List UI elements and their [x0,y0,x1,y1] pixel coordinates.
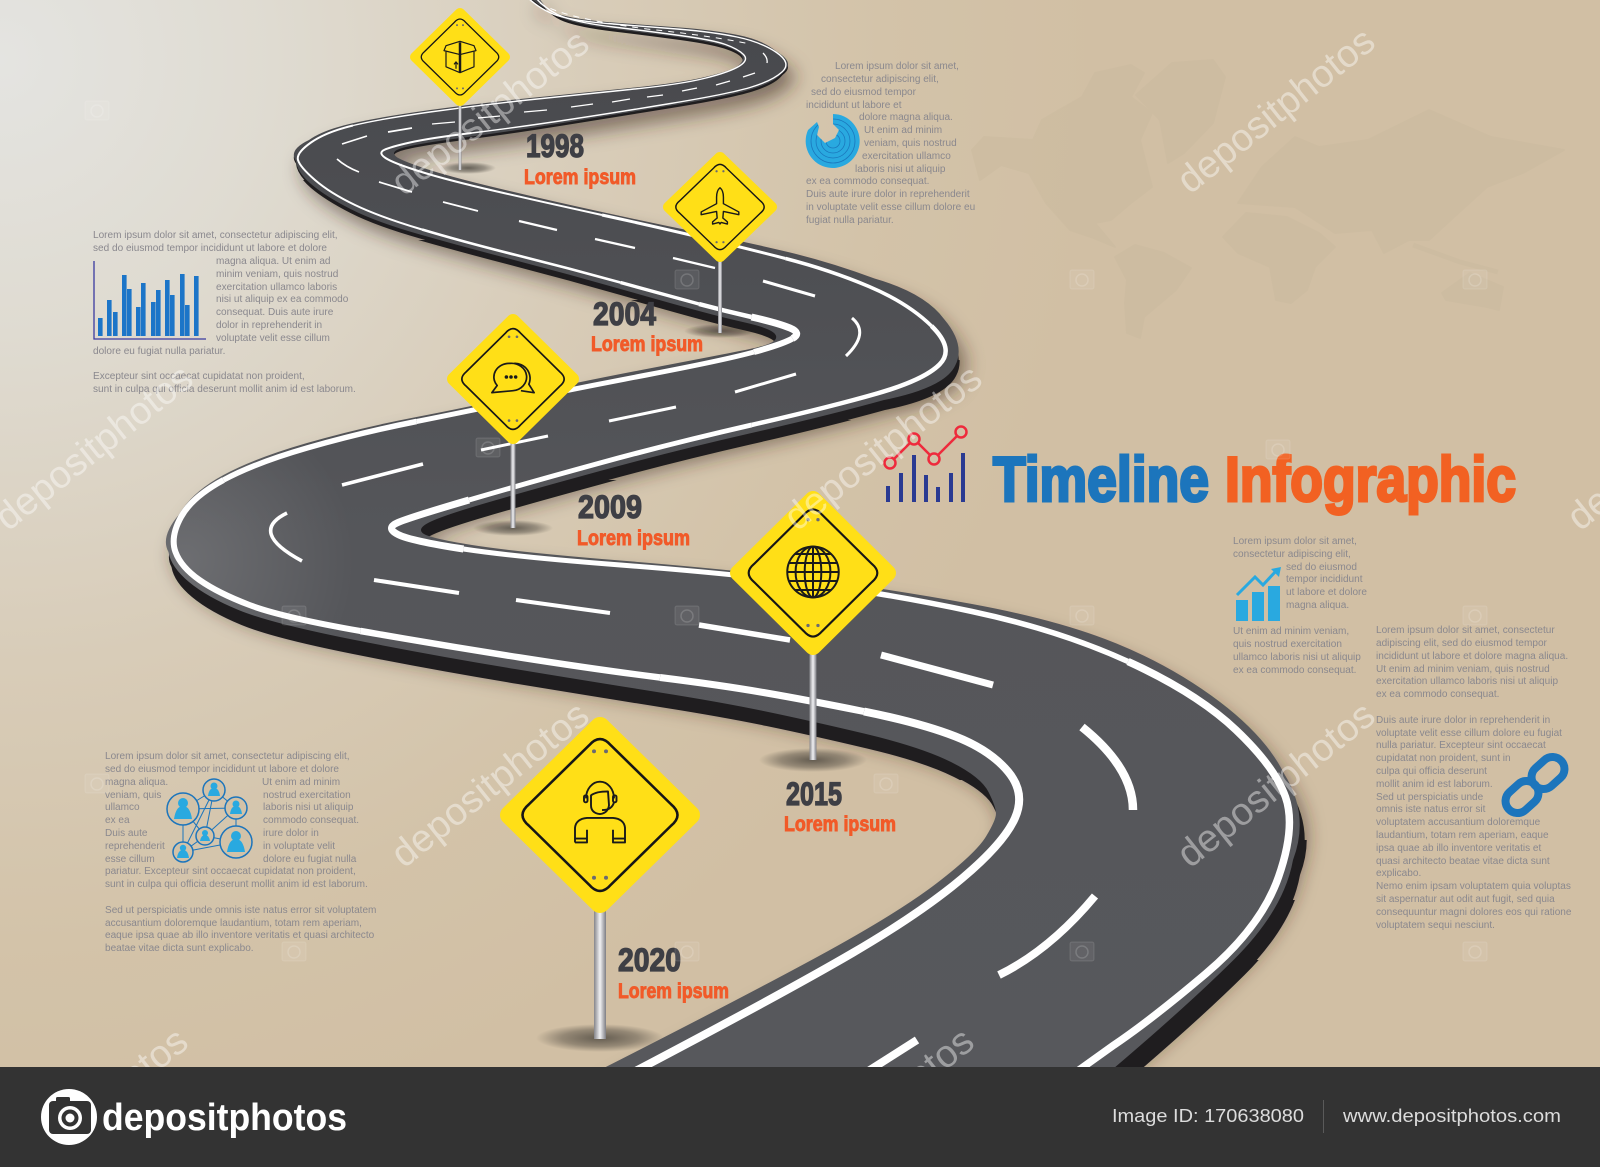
text block: upper left: Excepteur sint occaecat cupidatat non proident, [93,371,305,382]
text block: lower left: nostrud exercitation [263,790,351,801]
text block: far right: voluptatem sequi nesciunt. [1376,920,1495,931]
text block: upper left: nisi ut aliquip ex ea commodo [216,294,349,305]
text block: far right: incididunt ut labore et dolore magna aliqua. [1376,651,1568,662]
year label 2020: Lorem ipsum [618,979,729,1003]
year label 1998: 1998 [526,128,584,164]
text block: lower left: laboris nisi ut aliquip [263,802,354,813]
text block: right small: ex ea commodo consequat. [1233,665,1356,676]
text block: lower left: veniam, quis [105,790,161,801]
text block: right small: Ut enim ad minim veniam, [1233,626,1349,637]
footer banner [0,1067,1600,1167]
road black side lip [166,0,1311,1095]
text block: lower left: in voluptate velit [263,841,335,852]
year label 2015: 2015 [786,776,842,812]
sign 2004: plane [669,158,771,333]
text block: upper left: minim veniam, quis nostrud [216,269,338,280]
watermark text: depositphotos [1169,19,1383,202]
icon: radial chart [806,114,860,168]
text block: top centre: veniam, quis nostrud [864,138,957,149]
world map [972,60,1564,338]
text block: right small: Lorem ipsum dolor sit amet, [1233,536,1357,547]
icon: chain link [1501,752,1569,818]
text block: right small: ullamco laboris nisi ut aliquip [1233,652,1361,663]
icon: bar chart [94,261,206,339]
text block: right small: consectetur adipiscing elit, [1233,549,1351,560]
text block: top centre: incididunt ut labore et [806,100,902,111]
text block: far right: Duis aute irure dolor in reprehenderit in [1376,715,1550,726]
text block: upper left: exercitation ullamco laboris [216,282,337,293]
year label 2009: 2009 [578,489,642,525]
sign 2009: chat bubbles [454,320,572,528]
text block: upper left: Lorem ipsum dolor sit amet, consectetur adipiscing elit, [93,230,338,241]
logo camera icon [41,1089,97,1145]
road light patch [166,466,294,622]
text block: lower left: ullamco [105,802,140,813]
text block: upper left: consequat. Duis aute irure [216,307,334,318]
year label 2004: Lorem ipsum [591,332,703,356]
text block: upper left: magna aliqua. Ut enim ad [216,256,330,267]
text block: lower left: irure dolor in [263,828,319,839]
text block: upper left: dolore eu fugiat nulla pariatur. [93,346,225,357]
text block: top centre: fugiat nulla pariatur. [806,215,894,226]
logo wordmark: depositphotos [102,1097,347,1139]
sign 2020: support agent [510,727,690,1039]
image id: Image ID: 170638080 [1112,1106,1304,1126]
text block: top centre: laboris nisi ut aliquip [855,164,946,175]
watermark text: depositphotos [1169,693,1383,876]
text block: far right: quasi architecto beatae vitae dicta sunt [1376,856,1550,867]
sign 1998: box [415,13,505,170]
watermark camera marks [85,101,1487,961]
watermark text: depositphotos [383,21,597,204]
text block: right small [1233,536,1367,676]
text block: far right: Lorem ipsum dolor sit amet, consectetur [1376,625,1555,636]
text block: top centre [806,61,975,226]
watermark text: depositphotos [383,693,597,876]
text block: lower left: esse cillum [105,854,155,865]
text block: top centre: ex ea commodo consequat. [806,176,929,187]
year label 2015 [784,776,896,836]
year label 2004: 2004 [593,296,656,332]
text block: lower left: accusantium doloremque laudantium, totam rem aperiam, [105,918,362,929]
text block: far right: ex ea commodo consequat. [1376,689,1499,700]
text block: far right: adipiscing elit, sed do eiusmod tempor [1376,638,1548,649]
road centre dashes [271,3,1133,1075]
text block: lower left: sed do eiusmod tempor incididunt ut labore et dolore [105,764,339,775]
text block: upper left: voluptate velit esse cillum [216,333,330,344]
text block: top centre: dolore magna aliqua. [859,112,953,123]
text block: right small: quis nostrud exercitation [1233,639,1342,650]
year label 2004 [591,296,703,356]
text block: lower left: reprehenderit [105,841,165,852]
year label 2009: Lorem ipsum [577,526,690,550]
text block: lower left: pariatur. Excepteur sint occaecat cupidatat non proident, [105,866,356,877]
text block: far right: laudantium, totam rem aperiam, eaque [1376,830,1549,841]
text block: far right: omnis iste natus error sit [1376,804,1486,815]
text block: lower left: beatae vitae dicta sunt explicabo. [105,943,254,954]
text block: far right: consequuntur magni dolores eos qui ratione [1376,907,1572,918]
watermark text: depositphotos [776,356,990,539]
road white edge line: inner side [174,0,1019,1075]
text block: right small: magna aliqua. [1286,600,1349,611]
text block: lower left: Lorem ipsum dolor sit amet, consectetur adipiscing elit, [105,751,350,762]
text block: far right: sit aspernatur aut odit aut fugit, sed quia [1376,894,1555,905]
text block: lower left: eaque ipsa quae ab illo inventore veritatis et quasi architecto [105,930,375,941]
title [993,445,1516,515]
year label 2009 [577,489,690,550]
text block: far right: culpa qui officia deserunt [1376,766,1487,777]
title: Timeline [993,445,1209,515]
text block: top centre: Duis aute irure dolor in reprehenderit [806,189,970,200]
text block: right small: sed do eiusmod [1286,562,1357,573]
text block: top centre: exercitation ullamco [862,151,951,162]
website: www.depositphotos.com [1342,1106,1561,1126]
title icon: line and bars [884,426,966,502]
text block: far right: nulla pariatur. Excepteur sint occaecat [1376,740,1546,751]
text block: top centre: consectetur adipiscing elit, [821,74,939,85]
text block: lower left: ex ea [105,815,130,826]
text block: lower left: Duis aute [105,828,148,839]
text block: top centre: in voluptate velit esse cillum dolore eu [806,202,975,213]
icon: people network [167,779,252,862]
road white edge line: outer side [381,0,1289,1075]
year label 2020 [618,942,729,1003]
text block: right small: ut labore et dolore [1286,587,1367,598]
text block: upper left: sed do eiusmod tempor incididunt ut labore et dolore [93,243,327,254]
road soft shadow [173,8,1307,1093]
text block: lower left: sunt in culpa qui officia deserunt mollit anim id est laborum. [105,879,368,890]
text block: right small: tempor incididunt [1286,574,1363,585]
text block: lower left [105,751,376,954]
text block: lower left: dolore eu fugiat nulla [263,854,357,865]
sign 2015: globe [738,499,888,760]
text block: far right: Nemo enim ipsam voluptatem quia voluptas [1376,881,1571,892]
road [161,0,1319,1067]
text block: far right: explicabo. [1376,868,1421,879]
text block: far right: mollit anim id est laborum. [1376,779,1493,790]
year label 2015: Lorem ipsum [784,812,896,836]
text block: top centre: Ut enim ad minim [864,125,942,136]
text block: lower left: Ut enim ad minim [262,777,340,788]
text block: far right: Sed ut perspiciatis unde [1376,792,1484,803]
road surface [166,0,1300,1080]
text block: far right: cupidatat non proident, sunt in [1376,753,1511,764]
text block: lower left: commodo consequat. [263,815,359,826]
year label 1998 [524,128,636,189]
year label 1998: Lorem ipsum [524,165,636,189]
title: Infographic [1225,445,1516,515]
text block: far right [1376,625,1572,931]
text block: upper left [93,230,356,395]
text block: upper left: dolor in reprehenderit in [216,320,322,331]
year label 2020: 2020 [618,942,681,978]
text block: far right: voluptatem accusantium doloremque [1376,817,1541,828]
text block: far right: voluptate velit esse cillum dolore eu fugiat [1376,728,1562,739]
text block: far right: ipsa quae ab illo inventore veritatis et [1376,843,1542,854]
text block: top centre: sed do eiusmod tempor [811,87,917,98]
text block: upper left: sunt in culpa qui officia deserunt mollit anim id est laborum. [93,384,356,395]
text block: top centre: Lorem ipsum dolor sit amet, [835,61,959,72]
text block: lower left: Sed ut perspiciatis unde omnis iste natus error sit voluptatem [105,905,376,916]
sign ground shadows [440,162,867,1052]
icon: rising bars [1236,567,1281,621]
text block: far right: Ut enim ad minim veniam, quis nostrud [1376,664,1550,675]
text block: far right: exercitation ullamco laboris nisi ut aliquip [1376,676,1558,687]
text block: lower left: magna aliqua. [105,777,168,788]
